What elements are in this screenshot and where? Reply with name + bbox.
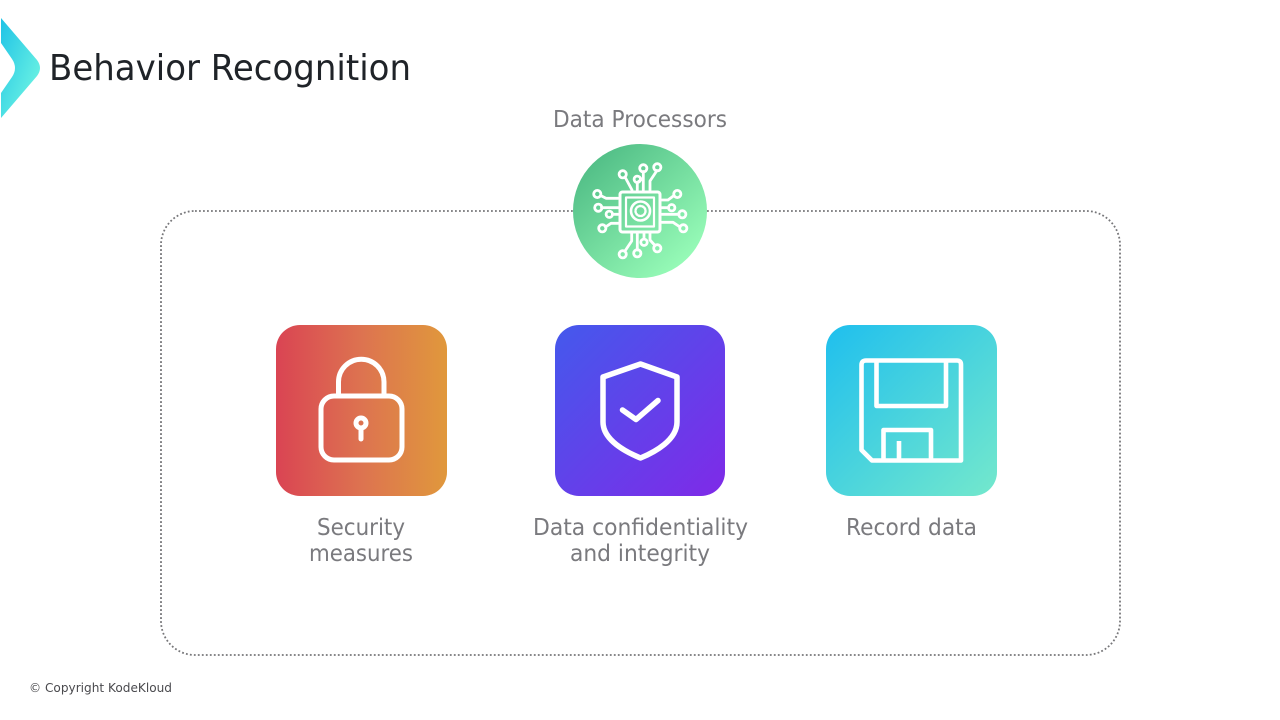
icon: security lock xyxy=(276,325,447,496)
label: Data confidentiality and integrity: and integrity xyxy=(570,541,710,567)
logo arrow xyxy=(1,18,40,118)
icon: floppy disk xyxy=(826,325,997,496)
label: Data confidentiality and integrity xyxy=(533,515,748,567)
icon: data processor chip xyxy=(573,144,707,278)
label: Record data: Record data xyxy=(846,515,977,541)
label: Security measures: Security xyxy=(317,515,405,541)
dotted container panel xyxy=(161,211,1120,655)
title: Behavior Recognition xyxy=(49,48,411,89)
icon: shield with check xyxy=(555,325,725,496)
heading: Data Processors: Data Processors xyxy=(553,107,727,133)
label: Security measures xyxy=(309,515,413,567)
label: Security measures: measures xyxy=(309,541,413,567)
copyright footer: © Copyright KodeKloud xyxy=(29,680,172,695)
label: Data confidentiality and integrity: Data confidentiality xyxy=(533,515,748,541)
